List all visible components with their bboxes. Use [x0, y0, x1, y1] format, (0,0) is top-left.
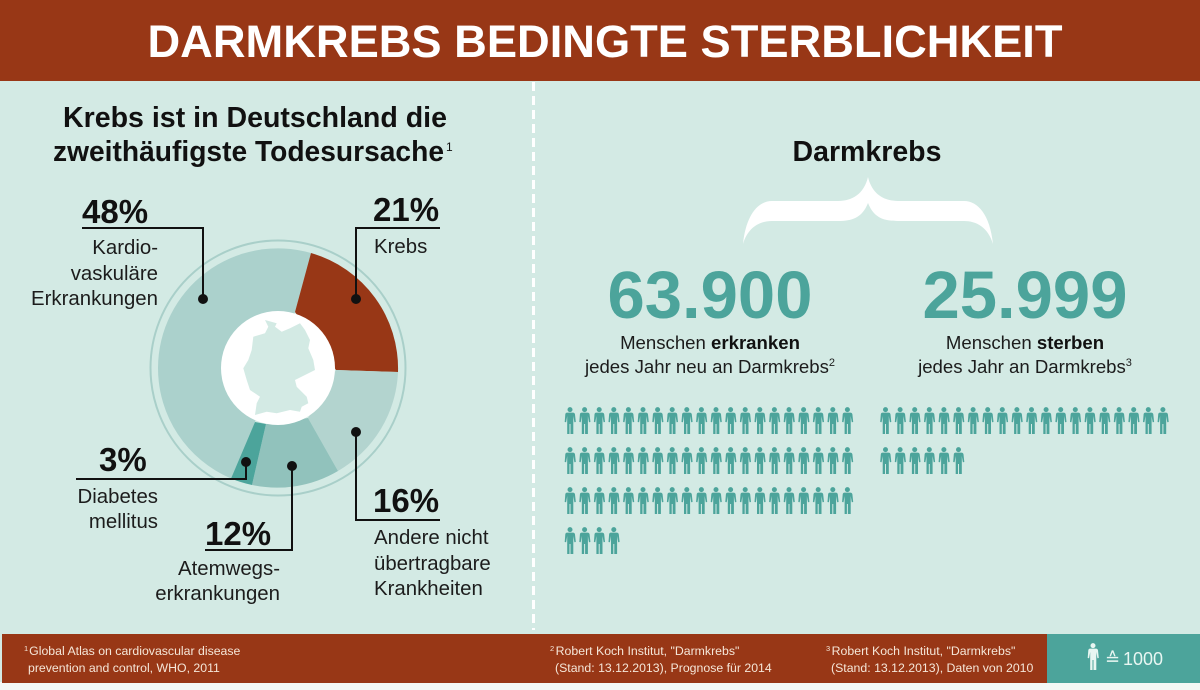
legend: one figure equals 1000: 1000 [1123, 649, 1163, 669]
callout: 3% [76, 441, 251, 533]
center hole [221, 311, 335, 425]
legend: one figure equals 1000: ≙ [1105, 649, 1120, 669]
left heading: 1 [446, 140, 453, 154]
source 3: 3 [826, 644, 830, 653]
stat: new cases: 2 [829, 357, 835, 369]
pictogram: 25.999 deaths [880, 407, 1169, 474]
left heading [53, 102, 453, 168]
outer ring [150, 240, 406, 496]
callout: 21% [351, 191, 440, 304]
left heading: Krebs ist in Deutschland die [63, 102, 447, 134]
callout: 12%: 12% [205, 515, 271, 552]
callout: 16% [351, 427, 491, 600]
stat: deaths: Menschen sterben [946, 332, 1104, 353]
source 1: 1 [24, 644, 28, 653]
segment: Kardiovaskuläre Erkrankungen [158, 248, 311, 478]
icon: curly brace [743, 177, 993, 244]
callout: 16%: übertragbare [374, 553, 491, 575]
callout: 16%: Andere nicht [374, 527, 489, 549]
header banner [0, 0, 1200, 81]
icon: map of Germany [243, 320, 315, 415]
stat: new cases: 63.900 [608, 258, 812, 333]
callout: 21%: 21% [373, 191, 439, 228]
callout: 12%: erkrankungen [155, 583, 280, 605]
callout: 12% [155, 461, 297, 605]
stat: deaths [917, 258, 1132, 377]
source 3: Robert Koch Institut, "Darmkrebs" [832, 644, 1015, 658]
source 2: 2 [550, 644, 554, 653]
callout: 48%: vaskuläre [71, 263, 158, 285]
divider [532, 82, 535, 630]
callout: 48%: Erkrankungen [31, 288, 158, 310]
stat: new cases: Menschen erkranken [620, 332, 800, 353]
source 2: Robert Koch Institut, "Darmkrebs" [556, 644, 739, 658]
source 1: prevention and control, WHO, 2011 [28, 661, 220, 675]
donut chart [150, 240, 406, 496]
stat: deaths: 3 [1126, 357, 1132, 369]
callout: 48%: 48% [82, 193, 148, 230]
legend: one figure equals 1000 [1047, 634, 1200, 683]
callout: 16%: Krankheiten [374, 578, 483, 600]
pictogram: 63.900 new cases [565, 407, 853, 554]
segment: Atemwegserkrankungen [252, 418, 338, 488]
callout: 3%: mellitus [89, 511, 158, 533]
callout: 3%: Diabetes [78, 486, 158, 508]
callout: 21%: Krebs [374, 236, 427, 258]
right heading: Darmkrebs [793, 136, 941, 168]
footer bar [2, 634, 1047, 683]
stat: deaths: 25.999 [923, 258, 1127, 333]
stat: new cases: jedes Jahr neu an Darmkrebs [585, 356, 829, 377]
callout: 48% [31, 193, 208, 310]
stat: deaths: jedes Jahr an Darmkrebs [918, 356, 1126, 377]
callout: 3%: 3% [99, 441, 147, 478]
segment: Andere [308, 370, 398, 471]
source 1: Global Atlas on cardiovascular disease [29, 644, 241, 658]
stat: new cases [584, 258, 835, 377]
title: DARMKREBS BEDINGTE STERBLICHKEIT [148, 16, 1062, 67]
segment: Diabetes [231, 422, 266, 485]
source 3: (Stand: 13.12.2013), Daten von 2010 [831, 661, 1034, 675]
callout: 48%: Kardio- [92, 237, 158, 259]
callout: 12%: Atemwegs- [178, 558, 280, 580]
source 2: (Stand: 13.12.2013), Prognose für 2014 [555, 661, 772, 675]
segment: Krebs [295, 253, 398, 372]
left heading: zweithäufigste Todesursache [53, 136, 444, 168]
callout: 16%: 16% [373, 482, 439, 519]
